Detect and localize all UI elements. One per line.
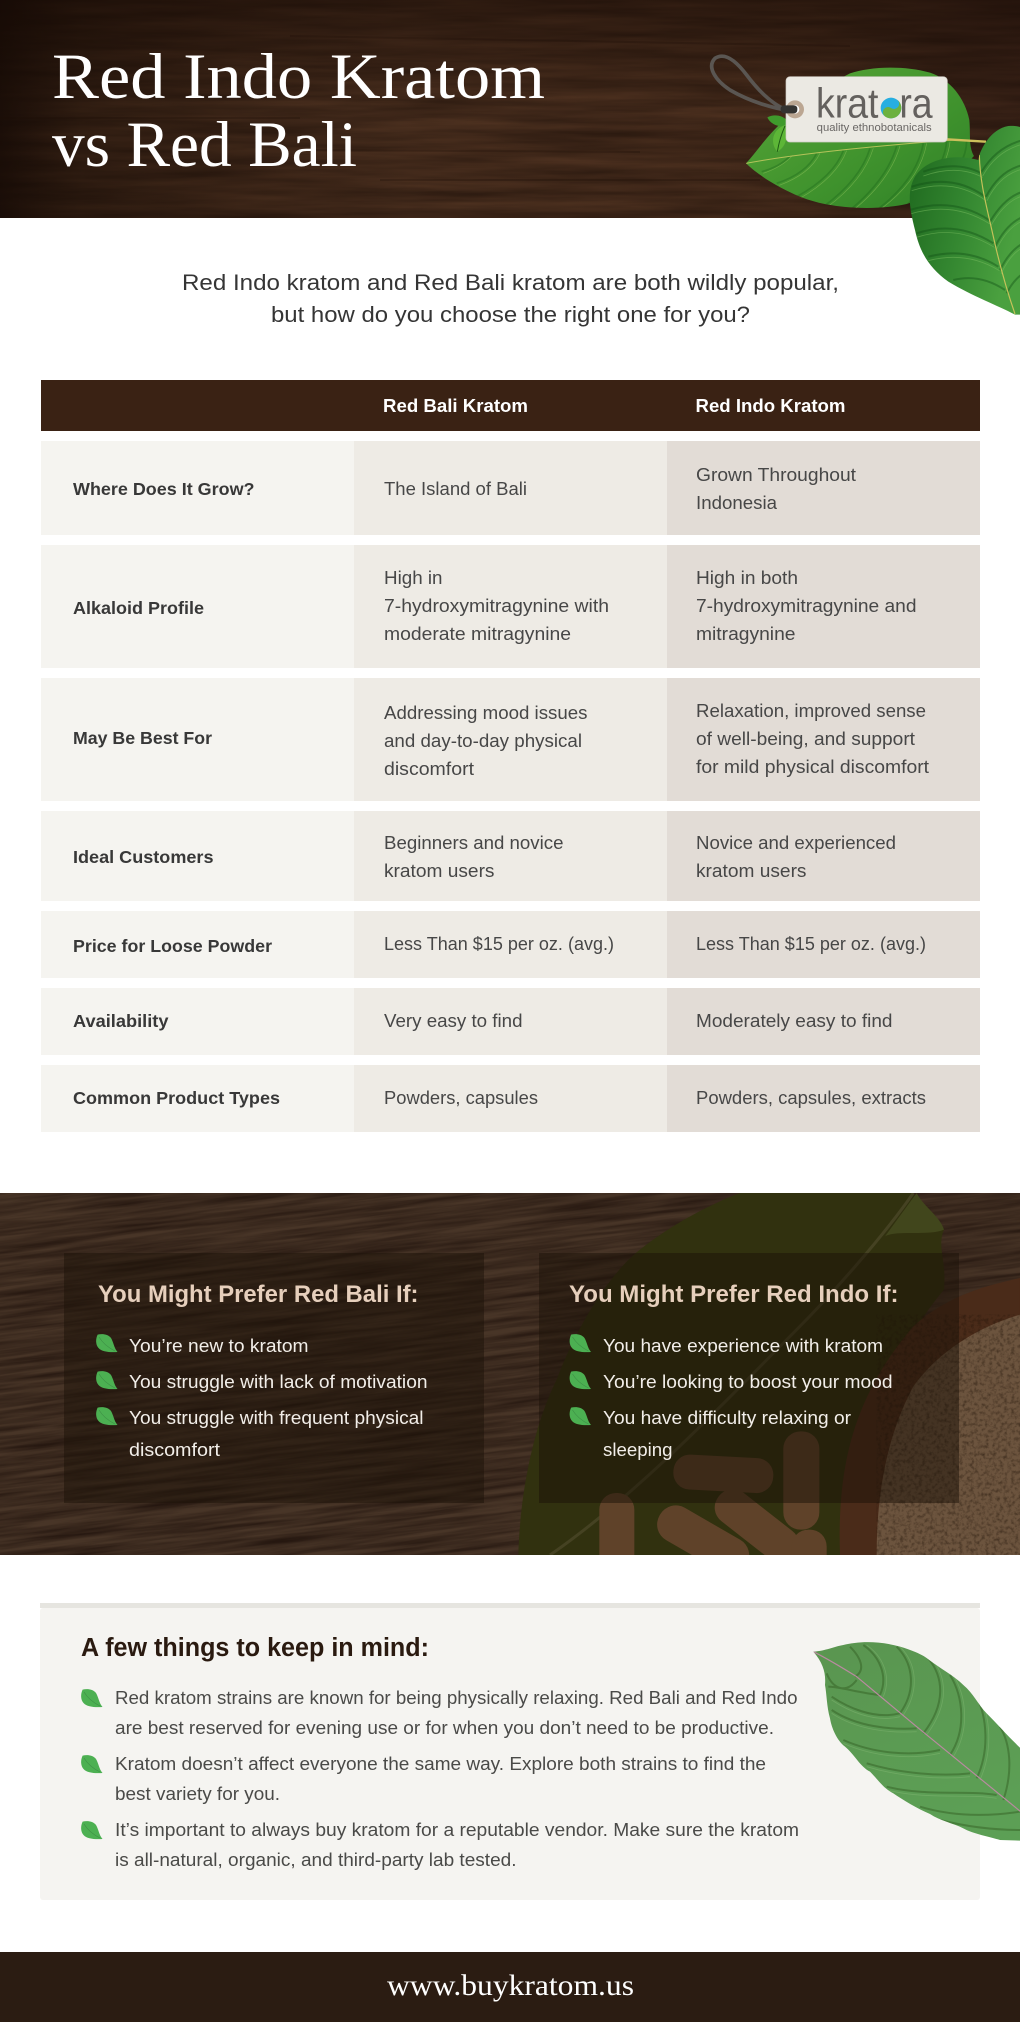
row: alkaloid profile: mitragynine [696, 623, 796, 644]
header banner [0, 0, 1020, 218]
row: alkaloid profile: Alkaloid Profile [73, 598, 204, 618]
note: physically relaxing [115, 1687, 798, 1738]
icon: logo yin-yang o [881, 97, 905, 122]
row: may be best for: Relaxation, improved sense [696, 700, 926, 721]
photo: leaf, bowl and capsules [518, 1193, 1020, 1581]
row: may be best for [41, 678, 980, 801]
row: alkaloid profile: 7-hydroxymitragynine and [696, 595, 916, 616]
row: common product types [41, 1065, 980, 1132]
icon: leaf bullet [96, 1331, 118, 1352]
row: availability: Availability [73, 1011, 169, 1031]
section: you might prefer [0, 1193, 1020, 1555]
title: Red Indo Kratom [52, 41, 545, 113]
icon: kratom leaf [813, 1642, 1020, 1841]
row: price for loose powder [41, 911, 980, 978]
row: where does it grow: Grown Throughout [696, 464, 856, 485]
table header row: Red Indo Kratom [696, 396, 846, 416]
row: price for loose powder: Less Than $15 per oz. (avg.) [696, 933, 926, 954]
row: ideal customers: kratom users [384, 860, 494, 881]
panel: red bali: You struggle with frequent physical [129, 1407, 424, 1428]
row: where does it grow: Where Does It Grow? [73, 479, 254, 499]
title [52, 41, 545, 181]
row: common product types: Powders, capsules, extracts [696, 1087, 926, 1108]
row: ideal customers: kratom users [696, 860, 806, 881]
icon: leaf stem [947, 139, 986, 142]
panel: red bali [64, 1253, 484, 1503]
icon: hero leaves with logo tag [712, 56, 1020, 315]
icon: leaf bullet [81, 1818, 102, 1839]
logo tagline: quality ethnobotanicals [817, 122, 932, 134]
icon: upper kratom leaf [746, 68, 974, 211]
row: common product types: Powders, capsules [384, 1087, 538, 1108]
note: effects vary: best variety for you. [115, 1783, 280, 1804]
panel: red indo: You have experience with kratom [603, 1335, 883, 1356]
note: reputable vendor: is all-natural, organic, and third-party lab tested. [115, 1849, 516, 1870]
table header row: Red Bali Kratom [383, 396, 528, 416]
panel: things to keep in mind [40, 1603, 1020, 1900]
intro text: Red Indo kratom and Red Bali kratom are both wildly popular, [182, 270, 839, 295]
row: availability: Moderately easy to find [696, 1010, 892, 1031]
note: reputable vendor [115, 1819, 799, 1870]
row: may be best for: May Be Best For [73, 728, 212, 748]
note: reputable vendor: It’s important to always buy kratom for a reputable vendor. Make sure the kratom [115, 1819, 799, 1840]
panel: red indo [539, 1253, 959, 1503]
icon: leaf bullet [570, 1331, 591, 1352]
panel: red bali: discomfort [129, 1439, 220, 1460]
panel: red bali: You’re new to kratom [129, 1335, 308, 1356]
row: common product types: Common Product Types [73, 1088, 280, 1108]
footer url: www.buykratom.us [387, 1969, 634, 2002]
row: where does it grow [41, 441, 980, 535]
row: ideal customers: Beginners and novice [384, 832, 564, 853]
row: ideal customers: Novice and experienced [696, 832, 896, 853]
row: may be best for: for mild physical discomfort [696, 756, 929, 777]
icon: tag string loop [712, 56, 790, 111]
intro text [182, 270, 839, 327]
row: ideal customers: Ideal Customers [73, 847, 214, 867]
heading: keep in mind: A few things to keep in mind: [81, 1634, 429, 1662]
row: price for loose powder: Less Than $15 per oz. (avg.) [384, 933, 614, 954]
note: effects vary [115, 1753, 766, 1804]
logo wordmark: kratora [816, 79, 933, 126]
row: availability [41, 988, 980, 1055]
title: vs Red Bali [52, 109, 357, 181]
footer bar [0, 1952, 1020, 2022]
row: ideal customers [41, 811, 980, 901]
icon: leaf bullet [570, 1368, 591, 1389]
panel: red bali: You Might Prefer Red Bali If: [98, 1281, 418, 1308]
intro text: but how do you choose the right one for you? [271, 302, 750, 327]
icon: leaf bullet [570, 1404, 591, 1425]
row: alkaloid profile: High in [384, 567, 442, 588]
row: may be best for: discomfort [384, 758, 474, 779]
icon: leaf bullet [81, 1752, 102, 1773]
icon: leaf bullet [81, 1686, 102, 1707]
icon: tag eyelet [781, 100, 804, 118]
icon: lower kratom leaf [910, 126, 1020, 315]
row: alkaloid profile: 7-hydroxymitragynine with [384, 595, 609, 616]
row: alkaloid profile: moderate mitragynine [384, 623, 571, 644]
row: alkaloid profile: High in both [696, 567, 798, 588]
icon: small leaf sprig [767, 115, 787, 152]
panel: red indo: sleeping [603, 1439, 672, 1460]
panel: red indo: You have difficulty relaxing or [603, 1407, 851, 1428]
row: may be best for: Addressing mood issues [384, 702, 588, 723]
note: effects vary: Kratom doesn’t affect everyone the same way. Explore both strains to find the [115, 1753, 766, 1774]
row: may be best for: of well-being, and support [696, 728, 915, 749]
panel: red indo: You Might Prefer Red Indo If: [569, 1281, 898, 1308]
panel: red bali: You struggle with lack of motivation [129, 1371, 428, 1392]
table header row [41, 380, 980, 431]
icon: leaf bullet [96, 1368, 118, 1389]
note: physically relaxing: are best reserved for evening use or for when you don’t need to be productive. [115, 1717, 774, 1738]
note: physically relaxing: Red kratom strains are known for being physically relaxing. Red Bali and Red Indo [115, 1687, 798, 1708]
panel: red indo: You’re looking to boost your mood [603, 1371, 892, 1392]
row: availability: Very easy to find [384, 1010, 522, 1031]
row: where does it grow: Indonesia [696, 492, 778, 513]
row: may be best for: and day-to-day physical [384, 730, 582, 751]
comparison table [41, 380, 980, 1132]
row: price for loose powder: Price for Loose Powder [73, 936, 272, 956]
row: where does it grow: The Island of Bali [384, 478, 527, 499]
row: alkaloid profile [41, 545, 980, 668]
icon: leaf bullet [96, 1404, 118, 1425]
logo tag [781, 77, 947, 142]
